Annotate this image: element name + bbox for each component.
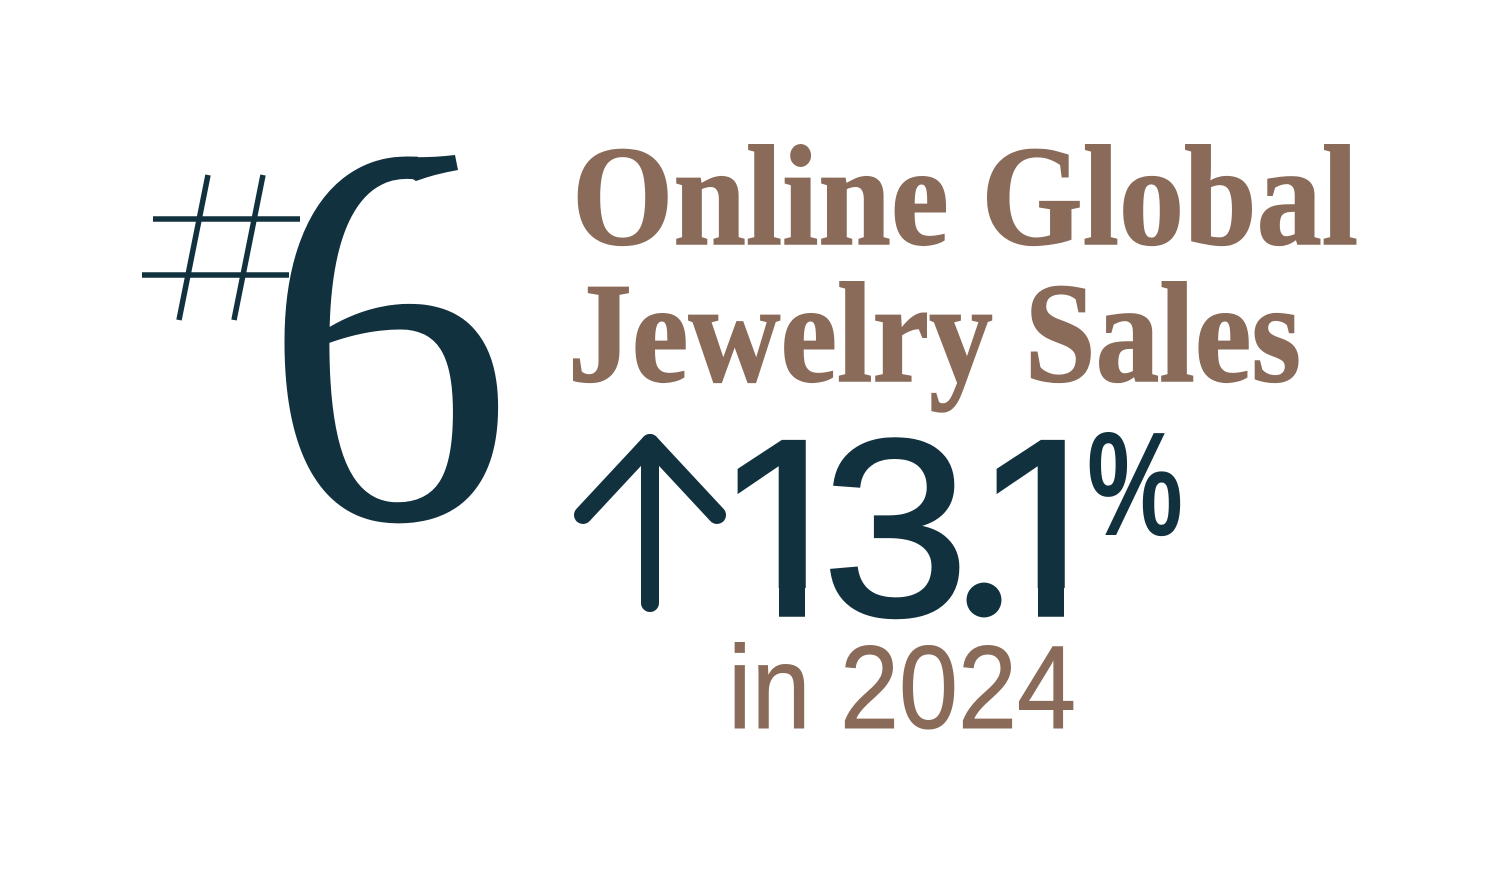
heading: Online Global: Online Global [572,117,1358,275]
number six: 6 [263,32,513,637]
heading: Jewelry Sales: Jewelry Sales [568,254,1301,412]
statistic: 13.1: 3 [822,387,969,669]
statistic: 13.1: . [958,439,1011,651]
statistic: 13.1: 1 [714,387,861,669]
statistic: 13.1: 1 [973,387,1120,669]
rank: hash and six [142,32,513,637]
statistic: 13.1 [714,387,1120,669]
statistic: percent sign: % [1087,402,1183,567]
caption: in 2024: in 2024 [728,622,1076,754]
icon: up arrow [583,443,717,603]
icon: hash sign [142,175,300,320]
